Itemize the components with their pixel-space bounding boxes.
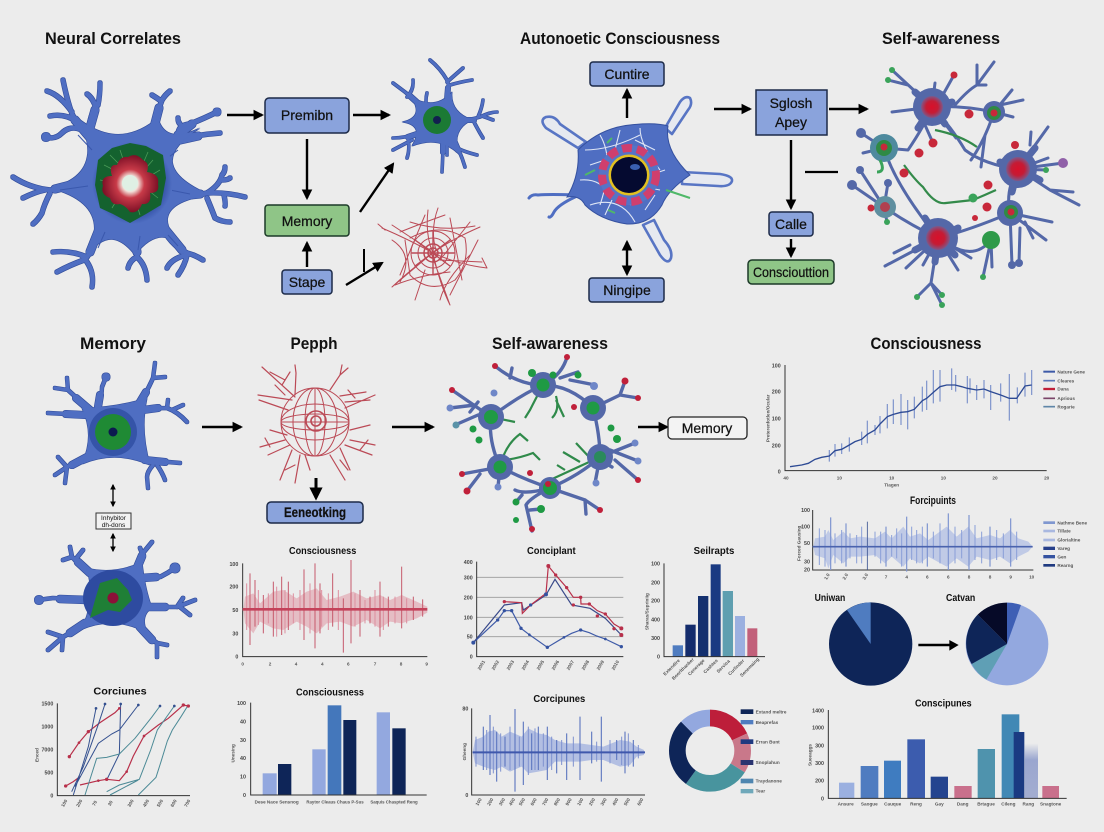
arrow: Premibn to small neuron — [353, 114, 389, 116]
chart: complant lines: 2003 — [506, 659, 515, 671]
chart: Consciousness grouped bars: 40 — [240, 719, 246, 725]
chart: blue waveform right: 100 — [801, 525, 810, 531]
title: Pepph: Pepph — [290, 334, 338, 353]
title: Autonoetic Consciousness: Autonoetic Consciousness — [520, 29, 720, 48]
chart: Seilrapts bars: 100 — [651, 562, 660, 568]
chart: complant lines: 2004 — [521, 659, 530, 671]
chart: Conscipunes bars: Reng — [910, 802, 922, 807]
box: Stape: Stape — [289, 274, 326, 290]
chart: complant lines: 2002 — [491, 659, 500, 671]
chart: Corciunes multi-line: 30 — [107, 799, 114, 807]
chart: Seilrapts bars: Curlinder — [727, 658, 745, 676]
chart: blue waveform right: Gen — [1057, 554, 1067, 559]
chart: Corciunes multi-line: 500 — [44, 770, 53, 776]
chart: Conscipunes bars: Snagtone — [1040, 802, 1062, 807]
chart: blue waveform right: 7 — [885, 574, 888, 579]
box: Consciouttion — [748, 260, 834, 284]
chart: blue waveform right: 20 — [804, 568, 810, 574]
chart title: Corcipunes: Corcipunes — [533, 694, 586, 705]
chart: donut with legend: Traydanone — [756, 779, 782, 784]
box: Calle — [769, 212, 813, 236]
box: Memory outlined — [668, 417, 747, 439]
chart: Seilrapts bars — [644, 546, 765, 681]
chart: line with error bars: 20 — [992, 475, 998, 480]
chart: Corcipunes waveform: 400 — [508, 797, 516, 807]
chart: donut with legend: Extand meltre — [756, 709, 787, 714]
chart: complant lines: 400 — [464, 560, 473, 566]
chart: Corciunes multi-line: 1500 — [41, 702, 53, 708]
chart: line with error bars: 0 — [778, 469, 781, 475]
chart: donut with legend: Beaprefas — [756, 720, 779, 725]
chart: red waveform: 4 — [321, 662, 324, 667]
box: tiny label: dh-dons — [102, 522, 126, 529]
chart: complant lines: 200 — [464, 595, 473, 601]
chart: Conscipunes bars: 1000 — [812, 726, 824, 732]
chart: Consciousness grouped bars: Saquis Chaspted Reng — [370, 799, 418, 804]
box: Ningipe — [589, 278, 664, 302]
pie right — [966, 603, 1048, 685]
box: Memory outlined: Memory — [682, 420, 732, 436]
chart: Corcipunes waveform: 300 — [498, 797, 506, 807]
chart: Corciunes multi-line: 500 — [156, 798, 164, 808]
title: Consciousness: Consciousness — [870, 334, 982, 353]
chart: line with error bars: 20 — [1044, 475, 1050, 480]
chart: Corcipunes waveform: 800 — [553, 797, 561, 807]
chart title: Conscipunes: Conscipunes — [915, 699, 972, 710]
chart title: Conciplant: Conciplant — [527, 546, 576, 557]
chart: red waveform: 200 — [229, 585, 238, 591]
chart: blue waveform right: Forced Gausing — [797, 525, 802, 561]
chart: Corciunes multi-line: 700 — [183, 798, 192, 808]
chart: blue waveform right: Tillate — [1057, 529, 1071, 534]
chart: blue waveform right: 6 — [926, 574, 929, 579]
chart: Corcipunes waveform: 200 — [588, 797, 596, 807]
chart: complant lines: 2001 — [477, 659, 486, 671]
chart: Conscipunes bars: 200 — [815, 778, 824, 784]
chart: blue waveform right: 4 — [905, 574, 908, 579]
chart: pie Uniwan to Catvan — [815, 593, 1048, 686]
chart: line with error bars: 10 — [837, 475, 842, 480]
chart: Corcipunes waveform: Gheeng — [462, 743, 467, 760]
chart: complant lines: 2010 — [611, 659, 620, 671]
chart: Consciousness grouped bars — [230, 687, 427, 804]
chart: red waveform: 50 — [232, 608, 238, 614]
chart: line with error bars: Aprious — [1057, 396, 1075, 401]
arrow: Memory to small neuron — [360, 164, 393, 212]
chart title: Consciousness: Consciousness — [296, 687, 364, 698]
box: Cuntire: Cuntire — [604, 66, 650, 82]
arrow: Stape to Memory — [306, 243, 308, 267]
chart: Corcipunes waveform: 400 — [611, 797, 620, 807]
chart: Corciunes multi-line: 1000 — [41, 725, 53, 731]
icon: red web neuron top — [378, 208, 487, 305]
title: Memory: Memory — [80, 334, 147, 353]
chart: Seilrapts bars: Extendire — [662, 658, 681, 677]
box: Eeneotking: Eeneotking — [284, 504, 346, 520]
chart: Corcipunes waveform — [462, 694, 645, 807]
chart: line with error bars: Tiagen — [884, 483, 899, 488]
chart: blue waveform right: 8 — [989, 574, 992, 579]
arrow: to Sglosh Apey — [714, 108, 750, 110]
chart: Seilrapts bars: 400 — [651, 618, 660, 624]
chart: line with error bars: Preterenfotlen/Ocular — [765, 394, 770, 442]
chart: blue waveform right: Vareg — [1057, 546, 1070, 551]
chart: Seilrapts bars: 200 — [651, 599, 660, 605]
chart: red waveform: 2 — [269, 662, 272, 667]
chart: blue waveform right: 6 — [947, 574, 950, 579]
arrow: Sglosh Apey to network — [829, 108, 867, 110]
chart: Consciousness grouped bars: 0 — [243, 793, 246, 799]
icon: blue neuron lower — [34, 542, 195, 657]
arrow: pie to pie — [918, 640, 959, 651]
chart: Corcipunes waveform: 900 — [565, 797, 573, 807]
chart: blue waveform right: 10 — [1029, 574, 1035, 579]
chart: line with error bars: 40 — [783, 475, 789, 480]
chart: blue waveform right: 8 — [968, 574, 971, 579]
chart: Corciunes multi-line: Enced — [34, 748, 39, 762]
box: Cuntire — [590, 62, 664, 86]
chart: line with error bars: Rogarie — [1057, 404, 1075, 409]
chart title: Forcipuints: Forcipuints — [910, 495, 956, 507]
icon: blue neuron Memory — [48, 363, 187, 488]
chart: blue waveform right: Nathme Bene — [1057, 520, 1087, 525]
chart: red waveform: 0 — [241, 662, 244, 667]
chart: complant lines: 0 — [470, 655, 473, 661]
chart: Corcipunes waveform: 200 — [486, 797, 495, 807]
chart: Seilrapts bars: 200 — [651, 580, 660, 586]
box: Ningipe: Ningipe — [603, 282, 651, 298]
chart: blue waveform right: 50 — [804, 541, 810, 547]
chart: Consciousness grouped bars: Dese Nace Sensnog — [255, 799, 299, 804]
chart: line with error bars: Cleares — [1057, 378, 1075, 383]
label: Uniwan: Uniwan — [815, 593, 845, 604]
title: Self-awareness top: Self-awareness — [882, 29, 1000, 48]
chart: Corciunes multi-line: 200 — [75, 798, 84, 808]
chart: Consciousness grouped bars: 40 — [240, 756, 246, 762]
chart: Conscipunes bars: Saogue — [861, 802, 878, 807]
box: Sglosh Apey: Sglosh — [770, 95, 812, 111]
arrow: neuron to Premibn — [227, 114, 262, 116]
chart: red waveform: 30 — [232, 631, 238, 637]
arrow: Premibn to Memory — [306, 139, 308, 198]
arrow: double to Ningipe — [626, 242, 628, 274]
box: Eeneotking — [267, 502, 363, 523]
chart: complant lines: 100 — [464, 615, 473, 621]
chart: blue waveform right: 2.0 — [842, 572, 849, 581]
chart: Corciunes multi-line: 70 — [91, 799, 98, 807]
chart: donut with legend: Erran Bunt — [756, 739, 780, 744]
chart: Corciunes multi-line: 100 — [60, 798, 69, 808]
chart title: Consciousness red: Consciousness — [289, 546, 357, 557]
chart: red waveform: 4 — [295, 662, 298, 667]
arrow: Calle to Consciouttion — [790, 239, 792, 256]
label: Catvan: Catvan — [946, 593, 975, 604]
box: Memory green — [265, 205, 349, 236]
chart: line with error bars: 10 — [941, 475, 946, 480]
box: tiny label — [96, 513, 131, 529]
arrow: Memory neuron to web — [202, 426, 241, 428]
chart: Corcipunes waveform: 100 — [576, 797, 585, 807]
chart: red waveform — [229, 546, 428, 667]
chart: Corcipunes waveform: 500 — [518, 797, 526, 807]
chart: Conscipunes bars: Brtague — [977, 802, 995, 807]
chart: Corcipunes waveform: 0 — [465, 793, 468, 799]
chart: complant lines: 50 — [467, 635, 473, 641]
chart: Corciunes multi-line — [34, 687, 192, 808]
chart: complant lines — [464, 546, 623, 671]
chart: Seilrapts bars: Servica — [716, 658, 731, 674]
chart: blue waveform right: 9 — [1009, 574, 1012, 579]
chart: Corciunes multi-line: 600 — [170, 798, 178, 808]
chart: line with error bars: Dana — [1057, 387, 1069, 392]
chart: red waveform: 0 — [235, 655, 238, 661]
chart: donut with legend: Tear — [756, 789, 765, 794]
chart: Conscipunes bars: Ansure — [838, 802, 854, 807]
chart: complant lines: 2005 — [536, 659, 545, 671]
arrow: web to Eeneotking — [314, 478, 318, 498]
chart: red waveform: 6 — [347, 662, 350, 667]
box: Consciouttion: Consciouttion — [753, 264, 829, 280]
chart: blue waveform right: 1.0 — [823, 572, 831, 581]
title: Neural Correlates: Neural Correlates — [45, 29, 181, 48]
chart: line with error bars: 200 — [772, 443, 781, 449]
arrow: up-down between neurons lower — [112, 534, 114, 551]
box: Calle: Calle — [775, 216, 807, 232]
icon: small blue neuron top — [393, 60, 497, 172]
chart: Corciunes multi-line: 7000 — [41, 747, 53, 753]
chart: blue waveform right: Rearng — [1057, 563, 1074, 568]
chart: Corcipunes waveform: 80 — [462, 707, 468, 713]
arrow: Sglosh Apey to Calle — [790, 140, 792, 208]
chart: complant lines: 2006 — [551, 659, 560, 671]
icon: red web sphere — [258, 365, 375, 483]
pie left — [829, 602, 912, 686]
chart: Conscipunes bars: 300 — [815, 761, 824, 767]
chart: Seilrapts bars: Senemaing — [739, 657, 760, 678]
chart: red waveform: 100 — [229, 562, 238, 568]
chart: blue waveform right: 30 — [804, 559, 810, 565]
chart: Conscipunes bars: Cileng — [1001, 802, 1016, 807]
chart title: Corciunes: Corciunes — [93, 687, 147, 698]
icon: neural network ring — [446, 354, 642, 532]
chart: Seilrapts bars: Boorlthanker — [671, 657, 695, 681]
chart: blue waveform right: 100 — [801, 508, 810, 514]
chart: Seilrapts bars: Cashtes — [702, 658, 719, 674]
box: Stape — [282, 270, 332, 294]
chart: Seilrapts bars: Sharas/Supriniig — [644, 593, 649, 630]
chart: Conscipunes bars: 1400 — [812, 708, 824, 714]
title: Self-awareness middle: Self-awareness — [492, 334, 608, 353]
chart: complant lines: 2009 — [596, 659, 605, 671]
chart: Corcipunes waveform: 300 — [600, 797, 608, 807]
chart: Seilrapts bars: 0 — [657, 655, 660, 661]
chart: Corcipunes waveform: 100 — [475, 797, 483, 807]
arrow: up-down between neurons upper — [112, 485, 114, 506]
arrow: network to Memory — [638, 426, 667, 428]
chart: Conscipunes bars: 0 — [821, 796, 824, 802]
chart: Conscipunes bars: Cauque — [884, 802, 902, 807]
icon: autonoetic neuron — [529, 97, 732, 261]
chart: blue waveform right — [797, 508, 1087, 581]
chart: Corciunes multi-line: 400 — [142, 798, 150, 808]
arrow: up to Cuntire — [626, 90, 628, 118]
chart: Corcipunes waveform: 600 — [636, 797, 645, 807]
box: Sglosh Apey: Apey — [775, 114, 807, 130]
chart: Consciousness grouped bars: Raytor Cleaus Chaus P-Sus — [306, 799, 364, 804]
chart: Conscipunes bars: Sueeaggs — [808, 744, 813, 766]
icon: large neuron — [13, 80, 245, 287]
chart title: Seilrapts: Seilrapts — [694, 546, 735, 557]
chart: Consciousness grouped bars: 10 — [240, 775, 246, 781]
arrow: web to network — [392, 426, 433, 428]
chart: Conscipunes bars: Rang — [1023, 802, 1034, 807]
box: Memory green: Memory — [282, 213, 332, 229]
chart: Conscipunes bars — [808, 699, 1067, 807]
chart: Corcipunes waveform: 700 — [541, 797, 550, 807]
chart: line with error bars: 10 — [889, 475, 895, 480]
chart: line with error bars: 100 — [772, 363, 781, 369]
box: tiny label: Inhybitor — [101, 515, 127, 522]
icon: self-awareness neural network top — [847, 62, 1079, 308]
chart: line with error bars: 100 — [772, 417, 781, 423]
line stub — [805, 171, 838, 173]
chart: Conscipunes bars: Gay — [935, 802, 944, 807]
chart: Seilrapts bars: 300 — [651, 636, 660, 642]
chart: complant lines: 2008 — [581, 659, 590, 671]
chart: line with error bars: 200 — [772, 389, 781, 395]
arrow: Stape to red web — [346, 249, 382, 285]
box: Sglosh Apey — [756, 90, 827, 135]
chart: donut with legend — [677, 709, 787, 794]
chart: Consciousness grouped bars: Unesing — [230, 744, 235, 763]
chart: blue waveform right: Glorialtine — [1057, 538, 1081, 543]
chart: red waveform: 8 — [400, 662, 403, 667]
chart: red waveform: 7 — [374, 662, 377, 667]
chart: line with error bars — [765, 363, 1085, 488]
chart: complant lines: 2007 — [566, 659, 575, 671]
chart: complant lines: 300 — [464, 575, 473, 581]
chart: Corcipunes waveform: 600 — [530, 797, 538, 807]
box: Premibn: Premibn — [281, 107, 333, 123]
chart: Corciunes multi-line: 0 — [50, 794, 53, 800]
chart: Seilrapts bars: Cenerage — [687, 658, 706, 677]
chart: Consciousness grouped bars: 30 — [240, 738, 246, 744]
chart: Consciousness grouped bars: 100 — [237, 701, 246, 707]
chart: Conscipunes bars: 300 — [815, 744, 824, 750]
chart: donut with legend: Snoplahun — [756, 760, 780, 765]
chart: red waveform: 9 — [425, 662, 428, 667]
chart: Corcipunes waveform: 500 — [623, 797, 631, 807]
chart: Corciunes multi-line: 300 — [127, 798, 135, 808]
chart: blue waveform right: 3.0 — [862, 572, 869, 581]
chart: Conscipunes bars: Dang — [957, 802, 969, 807]
chart: line with error bars: Nature Gene — [1057, 369, 1085, 374]
box: Premibn — [265, 98, 349, 133]
